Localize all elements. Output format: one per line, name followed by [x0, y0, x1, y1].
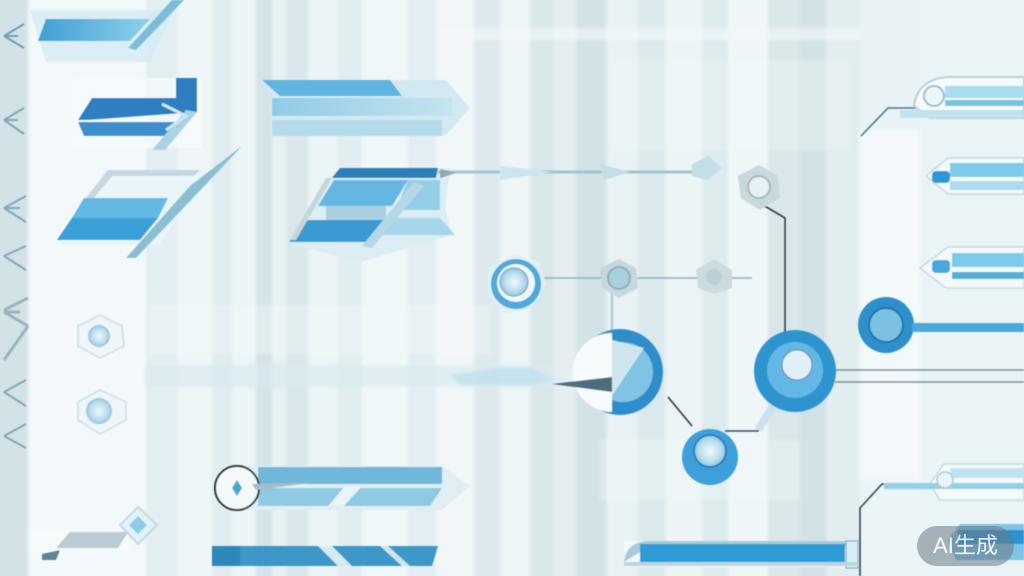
node: lower blue — [682, 429, 738, 485]
connector lines — [542, 205, 1024, 431]
right lower capsule and frame line — [860, 464, 1024, 576]
node: right blue with pointer — [858, 297, 1024, 353]
chevron bar: top left — [30, 0, 184, 62]
chevron bar: stacked light blue — [57, 146, 242, 258]
left edge arrow ticks — [4, 24, 28, 448]
right capsule two — [926, 158, 1024, 194]
chevron bar: dark blue block — [72, 78, 202, 150]
bottom bar — [212, 546, 438, 566]
ring label bar — [215, 466, 470, 510]
node: small blue ring — [488, 254, 546, 314]
node: large half circle — [552, 329, 663, 415]
badge: AI generated: AI生成 — [933, 533, 998, 558]
top horizontal arrow line — [438, 156, 722, 180]
right top capsule — [861, 77, 1024, 136]
node: large blue — [754, 330, 836, 430]
left lens icons — [78, 315, 126, 434]
node: top grey — [738, 165, 780, 210]
wide pale banner — [258, 80, 470, 136]
badge: AI generated — [917, 526, 1014, 566]
nodes: small grey pair — [600, 259, 732, 298]
right capsule three — [920, 247, 1024, 288]
bottom right long bar — [624, 541, 860, 568]
parallelogram panel with long arrow — [288, 168, 455, 262]
bottom left tag — [30, 507, 157, 560]
